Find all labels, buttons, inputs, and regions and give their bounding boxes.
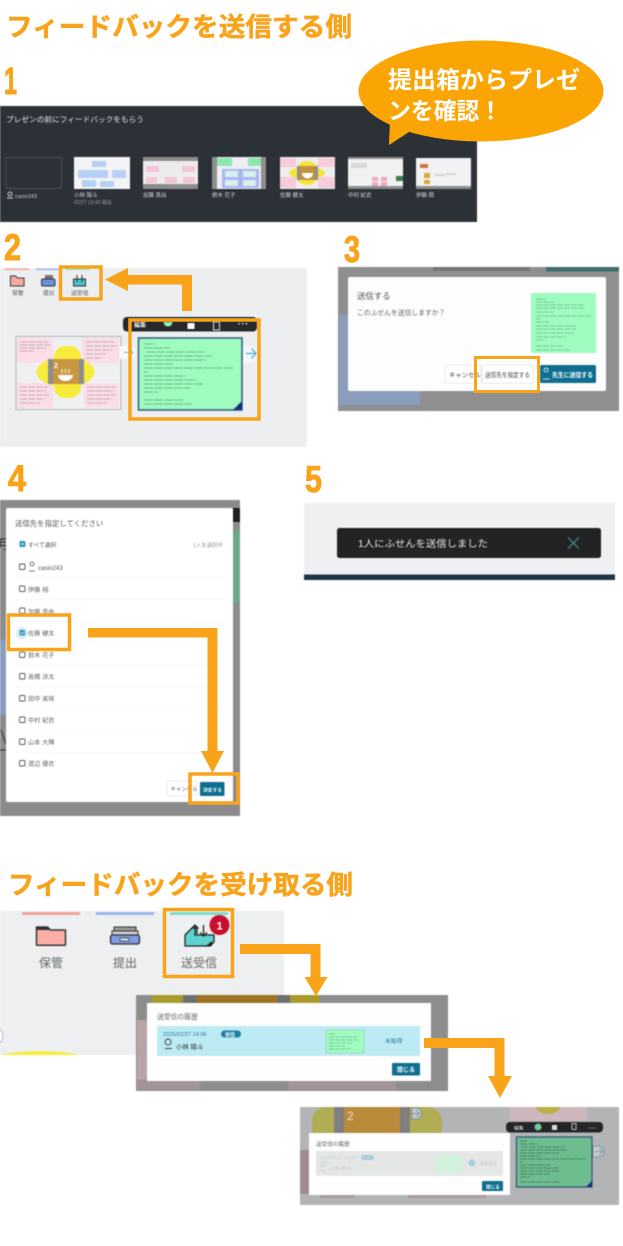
toolbar [123,317,257,332]
panel: history dialog [136,995,448,1091]
dialog [348,277,606,391]
recipient list: 鈴木 花子 [28,652,54,660]
panel: step 1 submission box: プレゼンの前にフィードバックをもらう [6,114,144,124]
button: close [482,1181,503,1191]
step number 5: 5 [305,459,322,500]
sticky note: green note [516,1137,592,1187]
dialog: 送信する [357,291,390,301]
panel: step 5 toast [304,503,615,580]
icon: send and receive with badge: 1 [216,920,223,932]
step number 2: 2 [4,227,21,268]
icon: send and receive: 送受信 [71,289,89,297]
callout: speech bubble: 提出箱からプレゼ [388,66,580,93]
dialog [147,1003,431,1081]
arrow: menu to history dialog [240,944,328,996]
highlight box: specify recipient [476,358,538,392]
button: close: 閉じる [486,1183,500,1189]
toolbar: • • • [238,322,248,328]
panel: result after receiving: 2 [347,1109,354,1123]
icon: submit tray [42,275,55,297]
thumbnail: 佐藤 健太: 佐藤 健太 [280,191,304,199]
icon: send and receive [71,275,89,297]
step number 1: 1 [4,61,17,103]
panel: step 2 board [0,268,307,447]
icon: submit tray: 提出 [43,289,55,297]
history row greyed: 受取済み [479,1160,497,1167]
icon: storage folder: 保管 [39,955,63,970]
toolbar: 編集 [134,321,146,329]
toolbar: • • • [589,1125,596,1130]
panel: receiver side menu [0,911,284,1055]
highlight box: selected note [130,320,259,419]
toolbar: 編集 [514,1124,524,1132]
button: cancel [445,365,482,383]
button: specify recipient [482,365,533,383]
panel: step 1 submission box [0,106,477,222]
history row: 受信 [225,1031,235,1038]
thumbnail: sticky note layout: 2 [54,363,58,370]
select all row: 1人を選択中 [193,541,223,549]
arrow: history dialog to result [424,1038,512,1098]
history row: 未取得 [385,1037,403,1045]
thumbnail: own empty slot [6,158,62,200]
arrow: note to send button [105,268,192,311]
icon: arrow right of note [593,1146,604,1157]
thumbnail: 小林 陽斗 [74,157,130,206]
dialog: 送受信の履歴 [316,1140,350,1148]
panel: step 4 recipient dialog [0,500,240,816]
callout: speech bubble [358,40,604,145]
icon: arrow left of note [120,346,136,359]
history row greyed [316,1151,503,1176]
thumbnail: sticky note layout [16,336,121,410]
thumbnail: 佐藤 健太 [280,157,335,199]
step number 4: 4 [8,458,26,499]
title: receiver side: フィードバックを受け取る側 [8,870,353,900]
thumbnail: 中村 紀衣 [348,157,403,199]
dialog: 送信先を指定してください [15,519,103,528]
recipient list: 加藤 真由 [28,608,54,616]
thumbnail: 伊藤 翔 [416,158,471,199]
panel: result after receiving [300,1107,619,1205]
button: cancel [167,781,198,796]
toolbar [506,1122,603,1132]
select all row: すべて選択 [28,541,57,549]
recipient list: 渡辺 優衣 [28,760,54,768]
arrow: recipient to confirm [88,628,224,773]
history row: 2025/02/27 14:06 [163,1032,207,1038]
highlight box: selected recipient [8,615,70,650]
recipient list: 佐藤 健太 [28,630,54,638]
toast message: 1人にふせんを送信しました [358,537,488,550]
dialog: このふせんを送信しますか？ [357,308,445,317]
button: send to teacher: 先生に送信する [552,370,593,379]
recipient list: 田中 美咲 [28,695,55,703]
title: sender side: フィードバックを送信する側 [6,12,352,42]
recipient list: 山本 大輝 [28,738,54,746]
dialog [309,1133,510,1195]
button: confirm [200,782,224,796]
note preview [531,293,596,353]
step number 3: 3 [344,229,360,270]
button: specify recipient: 送信先を指定する [485,370,530,379]
button: cancel: キャンセル [449,371,482,379]
thumbnail: 加藤 真由: 加藤 真由 [143,191,167,199]
icon: arrow right of note [243,346,258,363]
recipient list: 伊藤 翔 [28,586,48,594]
recipient list: 高橋 涼太 [28,673,54,681]
history row [157,1026,420,1056]
icon: send and receive with badge [181,915,230,970]
button: cancel: キャンセル [170,786,198,793]
highlight box: send and receive [164,910,232,976]
dialog [6,508,233,802]
icon: submit tray [110,927,140,970]
dialog: 送受信の履歴 [157,1012,198,1021]
toast message [337,528,601,558]
panel: step 3 send dialog [338,267,619,411]
thumbnail: 中村 紀衣: 中村 紀衣 [348,191,372,199]
thumbnail: 鈴木 花子 [212,157,266,199]
button: send to teacher [540,365,596,383]
recipient list: 中村 紀衣 [28,716,54,724]
icon: storage folder [36,927,66,970]
history row greyed: 小林 陽斗 [330,1165,351,1172]
thumbnail: 伊藤 翔: 伊藤 翔 [416,191,435,199]
button: close [392,1063,420,1076]
history row greyed: 2025/02/27 14:06 [320,1155,356,1160]
thumbnail: 加藤 真由 [143,157,198,199]
icon: send and receive with badge: 送受信 [181,955,217,970]
recipient list: casio243 [38,565,63,572]
thumbnail: 小林 陽斗: 02/27 13:49 提出 [74,199,112,206]
thumbnail: 小林 陽斗: 小林 陽斗 [74,191,98,199]
button: confirm: 決定する [203,786,222,794]
icon: storage folder [10,276,24,297]
thumbnail: own empty slot: casio243 [15,194,37,200]
button: close: 閉じる [397,1067,415,1074]
highlight box: send button [60,267,101,299]
highlight box: confirm button [190,774,238,803]
recipient list [15,562,225,768]
callout: speech bubble: ンを確認！ [388,98,502,124]
icon: storage folder: 保管 [12,289,24,297]
sticky note: selected green note [138,338,242,410]
thumbnail: 鈴木 花子: 鈴木 花子 [212,191,236,199]
select all row [20,541,223,549]
icon: submit tray: 提出 [113,955,137,970]
history row: 小林 陽斗 [176,1042,204,1051]
